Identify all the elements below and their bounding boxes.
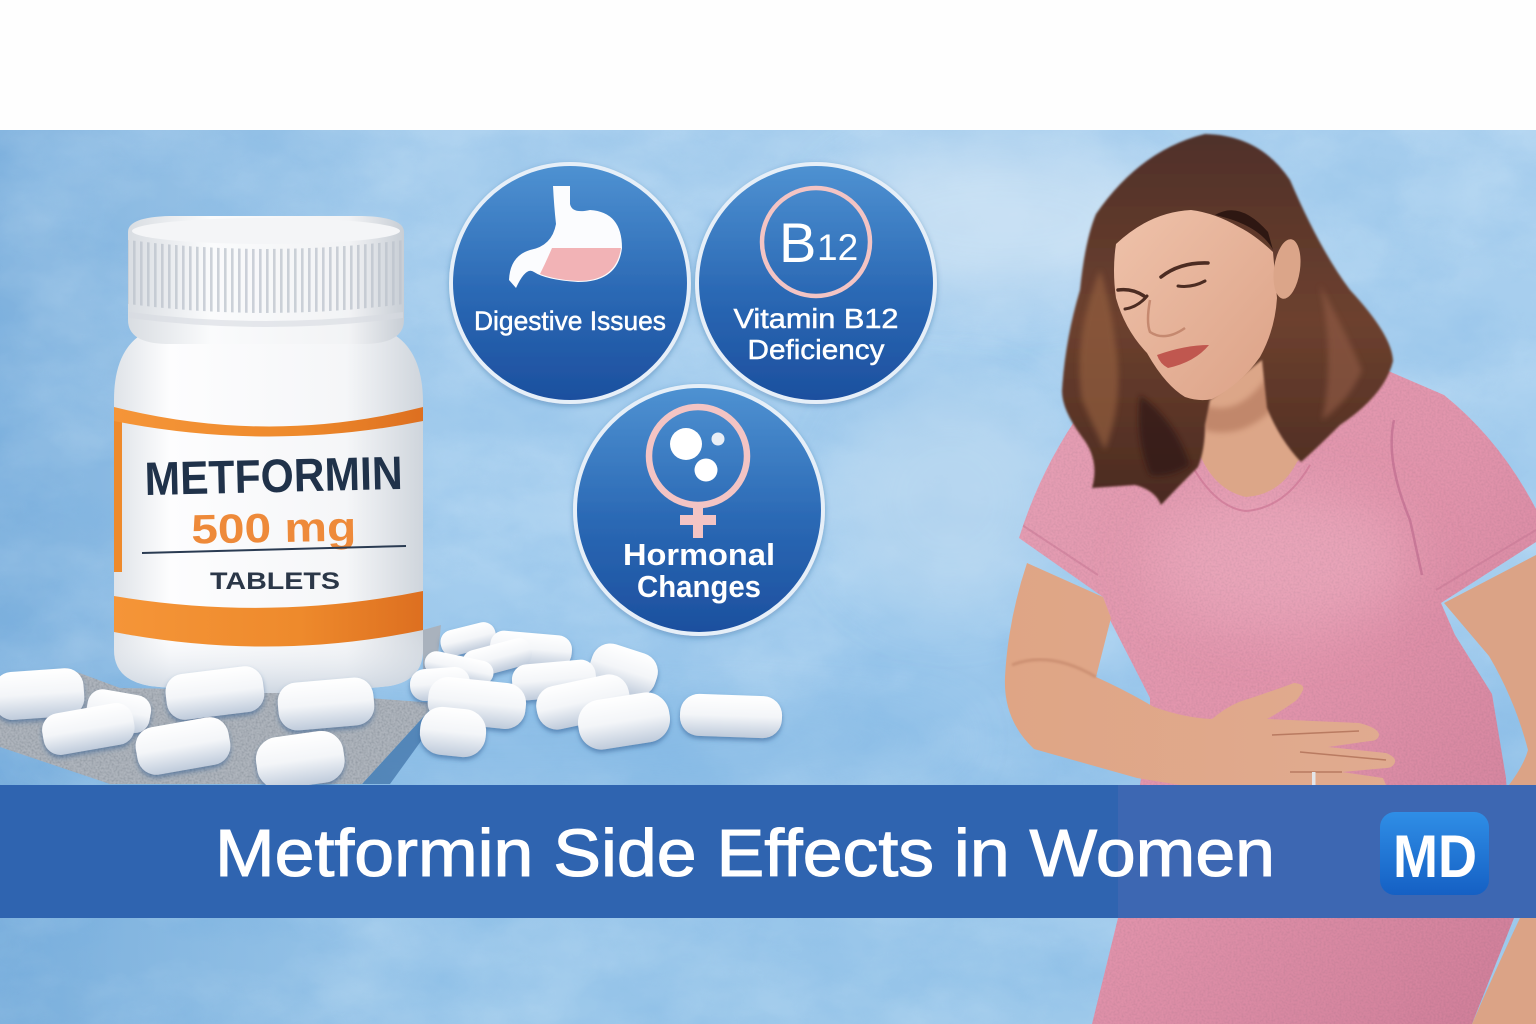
shirt xyxy=(1010,360,1536,1024)
logo: MD xyxy=(1380,812,1489,895)
left arm and hand on stomach xyxy=(1005,563,1395,785)
circle: vitamin B12 deficiency xyxy=(697,164,935,402)
hair shadow on temple xyxy=(1215,210,1273,250)
icon: B12 ring: 12 xyxy=(817,227,858,268)
background: white top strip xyxy=(0,0,1536,130)
circle: vitamin B12 deficiency: Deficiency xyxy=(748,334,884,365)
face xyxy=(1114,210,1277,400)
label orange top band xyxy=(114,407,423,436)
label orange bottom band xyxy=(114,591,423,647)
label dose: 500 mg xyxy=(191,504,357,552)
neck xyxy=(1185,340,1320,515)
circle: digestive issues xyxy=(451,164,689,402)
right arm xyxy=(1444,555,1536,785)
title: Metformin Side Effects in Women xyxy=(215,816,1275,891)
icon: B12 ring: B xyxy=(779,211,816,274)
lower right hand xyxy=(1472,918,1536,1024)
cap xyxy=(128,216,404,344)
title banner xyxy=(0,785,1536,918)
label tablets: TABLETS xyxy=(210,568,340,595)
label orange side stripe xyxy=(114,420,122,572)
label drug name: METFORMIN xyxy=(144,446,403,505)
ring xyxy=(1312,772,1316,785)
icon: B12 ring xyxy=(762,188,870,296)
blister pack xyxy=(0,625,442,784)
mouth xyxy=(1157,345,1209,368)
woman in pink shirt xyxy=(1005,134,1536,1024)
scattered tablets xyxy=(0,620,783,792)
eyes and brow xyxy=(1118,263,1208,309)
nose xyxy=(1148,300,1185,336)
bottle body xyxy=(114,330,423,693)
circle: hormonal changes xyxy=(575,386,823,634)
circle: hormonal changes: Changes xyxy=(637,569,761,604)
medicine bottle xyxy=(114,216,423,693)
logo: MD: MD xyxy=(1393,823,1477,890)
icon: female symbol with bubbles xyxy=(649,407,747,538)
hair xyxy=(1062,134,1393,505)
label: Hormonal xyxy=(623,537,775,572)
label: Digestive Issues xyxy=(474,306,666,336)
label: Vitamin B12 xyxy=(734,303,898,334)
icon: stomach xyxy=(509,186,622,288)
ear xyxy=(1270,237,1304,301)
